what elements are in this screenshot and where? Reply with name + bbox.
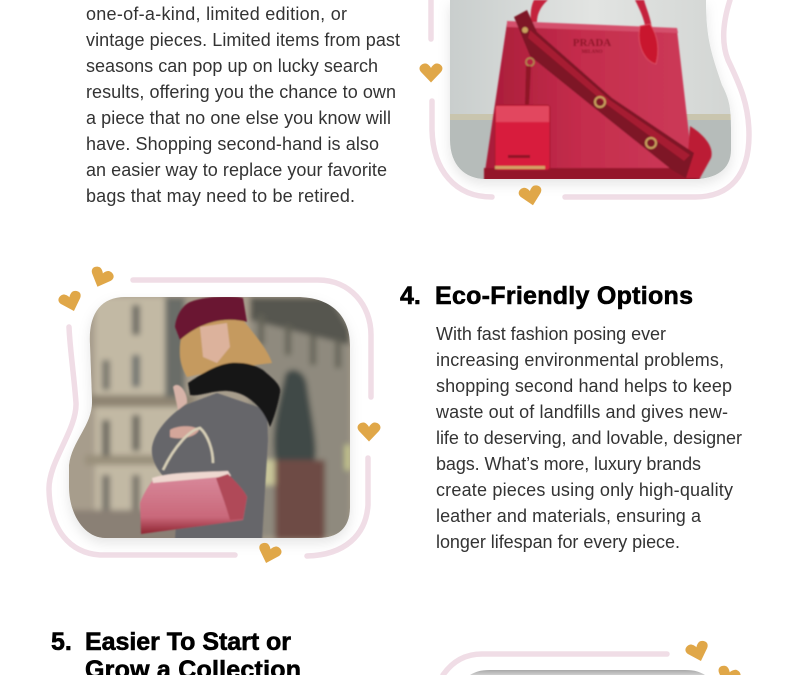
body text: section 4: leather and materials, ensuring a <box>436 506 702 526</box>
body text: section 3: one-of-a-kind, limited edition, or <box>86 4 347 24</box>
body text: section 3 <box>86 4 400 206</box>
icon: heart left <box>420 63 442 82</box>
icon: heart section 5 top <box>684 639 712 665</box>
body text: section 4: longer lifespan for every piece. <box>436 532 680 552</box>
body text: section 4: bags. What’s more, luxury brands <box>436 454 701 474</box>
heading: section 5 <box>51 628 301 675</box>
body text: section 4: increasing environmental problems, <box>436 350 724 370</box>
icon: heart section 5 lower <box>714 664 742 675</box>
heading: section 4: Eco-Friendly Options <box>435 282 693 310</box>
photo: woman holding pink bag <box>60 290 360 545</box>
icon: heart bottom <box>255 541 283 567</box>
photo: red Prada bag: MILANO <box>581 50 603 55</box>
body text: section 3: seasons can pop up on lucky search <box>86 56 378 76</box>
icon: heart right <box>358 422 380 442</box>
body text: section 4: create pieces using only high-quality <box>436 480 733 500</box>
icon: heart top <box>87 265 115 291</box>
icon: heart bottom <box>518 184 544 208</box>
decorative frame: woman with bag <box>49 280 371 556</box>
body text: section 3: an easier way to replace your favorite <box>86 160 387 180</box>
body text: section 4: waste out of landfills and gives new- <box>435 402 728 422</box>
body text: section 3: a piece that no one else you know will <box>86 108 391 128</box>
photo: red Prada bag: PRADA <box>573 37 611 49</box>
body text: section 4: life to deserving, and lovable, designer <box>436 428 742 448</box>
body text: section 3: vintage pieces. Limited items from past <box>86 30 400 50</box>
heading: section 5: Easier To Start or <box>85 628 291 656</box>
body text: section 3: have. Shopping second-hand is also <box>86 134 379 154</box>
heading: section 5: 5. <box>51 628 72 656</box>
decorative frame: section 5 photo <box>443 654 667 675</box>
heading: section 4: 4. <box>400 282 421 310</box>
body text: section 4 <box>435 324 742 552</box>
decorative frame: red bag <box>431 0 749 197</box>
photo: red Prada bag <box>450 0 735 182</box>
body text: section 3: results, offering you the chance to own <box>86 82 396 102</box>
photo: section 5 top edge <box>470 670 705 675</box>
body text: section 4: shopping second hand helps to keep <box>436 376 732 396</box>
icon: heart top left <box>57 289 85 315</box>
body text: section 4: With fast fashion posing ever <box>436 324 666 344</box>
body text: section 3: bags that may need to be retired. <box>86 186 355 206</box>
